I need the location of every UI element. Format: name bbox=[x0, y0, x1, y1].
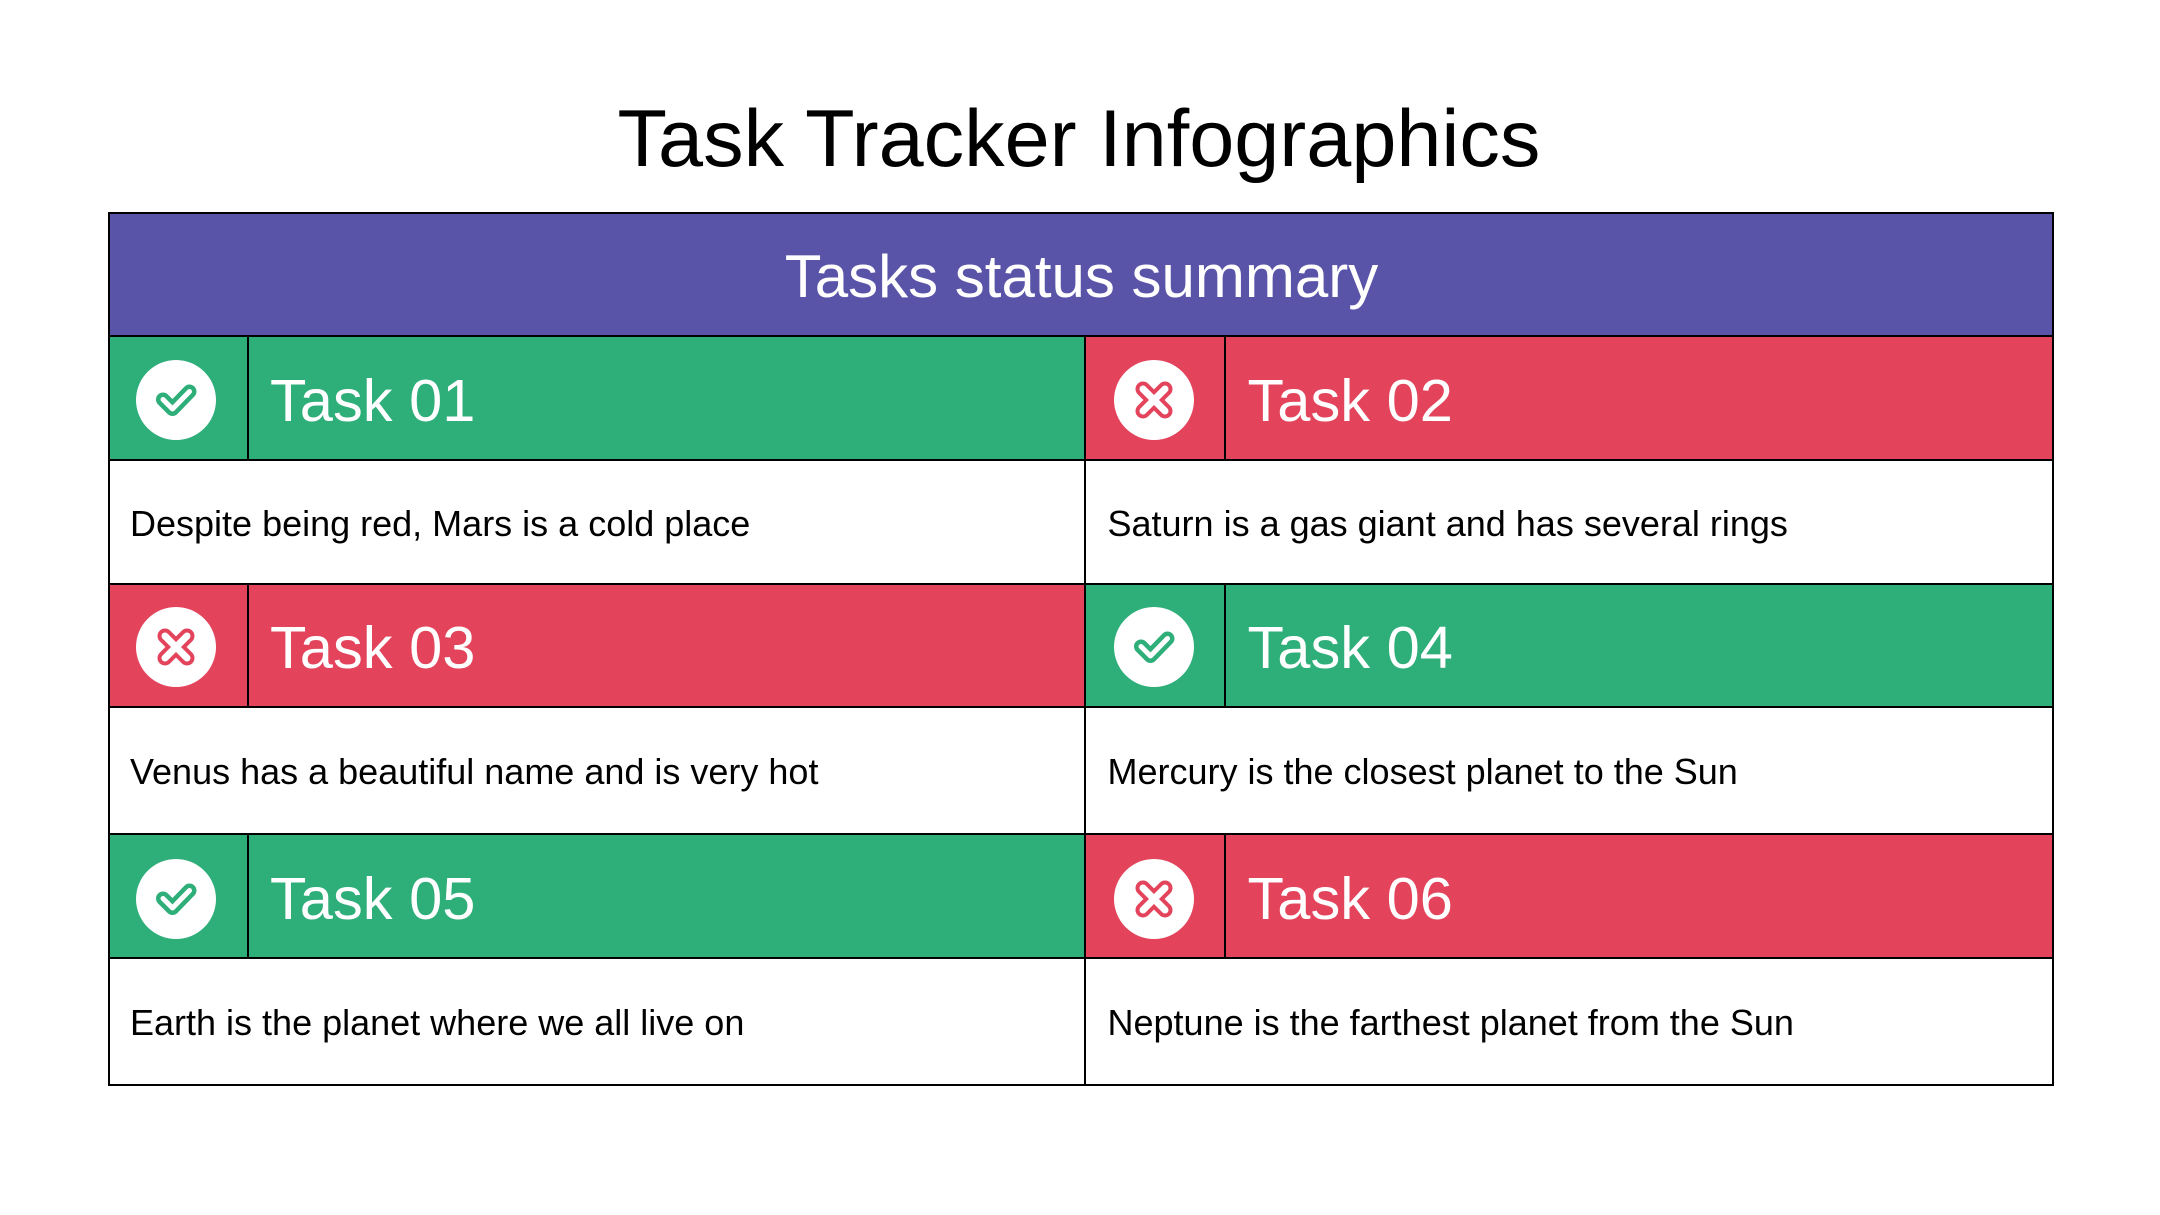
panel: task 04 bbox=[1086, 585, 2054, 833]
panel: task 05 bbox=[108, 835, 1084, 1086]
icon cell bbox=[108, 583, 249, 708]
panel: task 03 bbox=[108, 585, 1084, 833]
icon cell bbox=[108, 833, 249, 959]
task name cell bbox=[1224, 583, 2054, 708]
task name: Task 05 bbox=[270, 864, 475, 932]
description cell bbox=[108, 706, 1086, 835]
description cell bbox=[108, 459, 1086, 585]
task name: Task 03 bbox=[270, 614, 475, 680]
icon: check badge bbox=[136, 859, 216, 939]
description cell bbox=[1084, 706, 2054, 835]
panel: task 02 bbox=[1086, 337, 2054, 583]
task name cell bbox=[247, 833, 1086, 959]
icon cell bbox=[1084, 335, 1226, 461]
icon: cross badge bbox=[1114, 859, 1194, 939]
panel: task table bbox=[108, 212, 2054, 1086]
task name cell bbox=[247, 335, 1086, 461]
description: Mercury is the closest planet to the Sun bbox=[1108, 751, 1738, 792]
task name: Task 01 bbox=[270, 367, 475, 434]
icon: check badge bbox=[136, 360, 216, 440]
icon cell bbox=[1084, 583, 1226, 708]
description: Saturn is a gas giant and has several rings bbox=[1108, 502, 1788, 544]
panel: summary header bbox=[108, 212, 2054, 337]
icon cell bbox=[108, 335, 249, 461]
icon: cross badge bbox=[1114, 360, 1194, 440]
title: Task Tracker Infographics bbox=[618, 94, 1540, 184]
panel: task 06 bbox=[1086, 835, 2054, 1086]
task name cell bbox=[247, 583, 1086, 708]
task name cell bbox=[1224, 335, 2054, 461]
task name: Task 04 bbox=[1248, 614, 1453, 680]
description cell bbox=[108, 957, 1086, 1086]
description cell bbox=[1084, 459, 2054, 585]
description cell bbox=[1084, 957, 2054, 1086]
description: Despite being red, Mars is a cold place bbox=[130, 502, 750, 544]
heading: tasks status summary: Tasks status summary bbox=[785, 243, 1378, 310]
icon: check badge bbox=[1114, 607, 1194, 687]
task name: Task 06 bbox=[1248, 864, 1453, 932]
icon: cross badge bbox=[136, 607, 216, 687]
task name: Task 02 bbox=[1248, 367, 1453, 434]
task name cell bbox=[1224, 833, 2054, 959]
description: Venus has a beautiful name and is very hot bbox=[130, 751, 818, 792]
description: Neptune is the farthest planet from the Sun bbox=[1108, 1002, 1794, 1043]
panel: task 01 bbox=[108, 337, 1084, 583]
icon cell bbox=[1084, 833, 1226, 959]
description: Earth is the planet where we all live on bbox=[130, 1002, 744, 1043]
